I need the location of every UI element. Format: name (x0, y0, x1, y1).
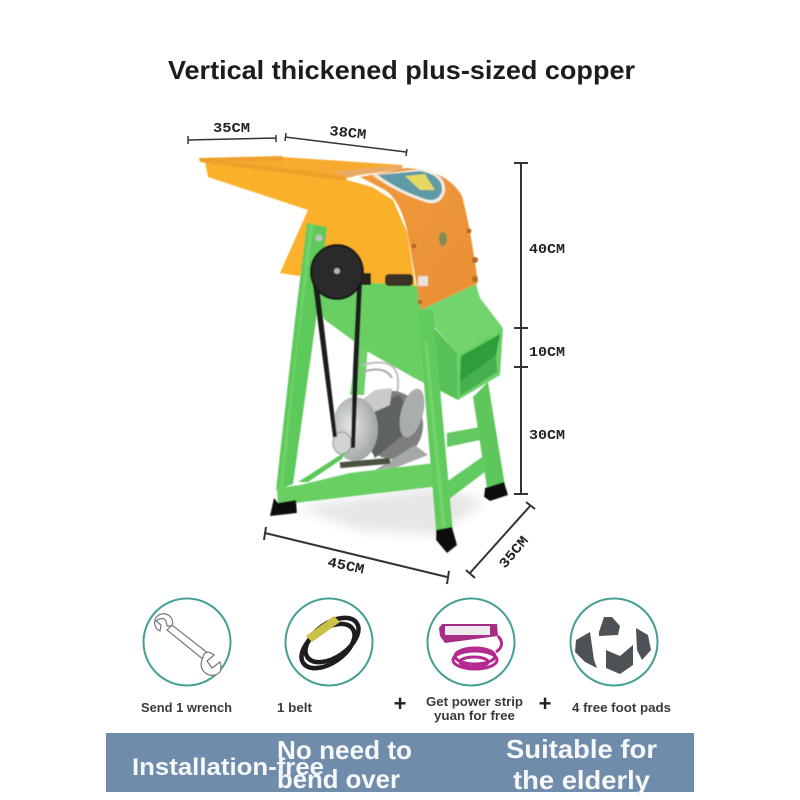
feature: no need to bend over: bend over (277, 764, 400, 794)
accessory: wrench (144, 598, 230, 686)
dimension: 35CM hopper width (188, 135, 276, 144)
hopper lower yellow panel (280, 210, 330, 276)
caption: power strip (426, 695, 523, 723)
label: 40CM: 40CM (529, 242, 565, 258)
label: 35CM: 35CM (213, 121, 250, 137)
floor shadow (297, 487, 485, 535)
hopper right rim (333, 165, 403, 177)
icon: belt coil (294, 609, 366, 677)
hopper front rim (199, 156, 347, 181)
accessory: belt (286, 598, 372, 686)
machine illustration (199, 156, 508, 553)
caption: power strip: Get power strip (426, 695, 523, 709)
spring (385, 274, 413, 286)
motor wires (362, 362, 398, 408)
label: 10CM: 10CM (529, 345, 565, 361)
leg bolt (316, 234, 322, 242)
plus sign: + (539, 691, 551, 716)
accessory: foot pads (570, 598, 658, 686)
label: 30CM: 30CM (529, 428, 565, 444)
title: Vertical thickened plus-sized copper (168, 55, 635, 85)
rear cross brace (447, 427, 480, 447)
chute side (427, 320, 458, 400)
icon: wrench (155, 614, 221, 675)
label: 35CM depth: 35CM (497, 534, 533, 572)
foot pads (270, 482, 508, 553)
motor housing (361, 391, 423, 459)
motor end bell (332, 397, 378, 461)
motor (332, 362, 429, 470)
bolt (418, 276, 428, 286)
plus sign: + (394, 691, 406, 716)
icon: power strip (439, 624, 498, 643)
motor base (375, 445, 428, 470)
dimension: 35CM depth (466, 502, 535, 578)
shaft end (361, 273, 371, 285)
caption: belt: 1 belt (277, 701, 313, 715)
hopper inner back wall (199, 157, 403, 178)
front base crossbar (277, 463, 447, 505)
capacitor box (362, 388, 392, 413)
drive belt (313, 285, 337, 437)
front right leg (418, 310, 453, 533)
icon: cable coil (453, 636, 502, 669)
green machine body (300, 278, 433, 387)
hopper side panel (205, 162, 416, 290)
cover label (372, 169, 445, 203)
caption: wrench: Send 1 wrench (141, 701, 232, 715)
icon: foot pads (575, 617, 651, 674)
feature: installation-free: Installation-free (132, 754, 324, 781)
feature: no need to bend over: No need to (277, 735, 412, 765)
back right leg (473, 382, 505, 488)
cover emblem (439, 232, 447, 246)
chute top (420, 284, 503, 353)
label: 45CM: 45CM (326, 555, 365, 579)
dimension: 45CM (264, 527, 449, 584)
caption: power strip: yuan for free (434, 709, 515, 723)
dimension: vertical heights (514, 163, 528, 494)
right side brace (445, 448, 498, 500)
label: 38CM: 38CM (328, 124, 367, 144)
feature band (106, 733, 694, 795)
front left leg (276, 223, 327, 490)
dimension lines (188, 133, 535, 584)
cover bolts (412, 228, 478, 304)
belt label (306, 616, 340, 642)
flywheel (311, 245, 363, 299)
feature: suitable for the elderly: Suitable for (506, 734, 657, 764)
back left leg (350, 340, 368, 395)
accessory: power strip (428, 598, 514, 686)
pulley and belt (311, 245, 363, 448)
caption: foot pads: 4 free foot pads (572, 701, 671, 715)
feature: no need to bend over (277, 735, 412, 794)
feature: suitable for the elderly: the elderly (513, 765, 651, 795)
chute opening (457, 328, 503, 400)
feature: suitable for the elderly (506, 734, 657, 795)
motor pulley (333, 432, 351, 454)
rear leg lower (484, 450, 505, 488)
dimension: 38CM (285, 133, 407, 156)
orange cover (360, 168, 478, 310)
